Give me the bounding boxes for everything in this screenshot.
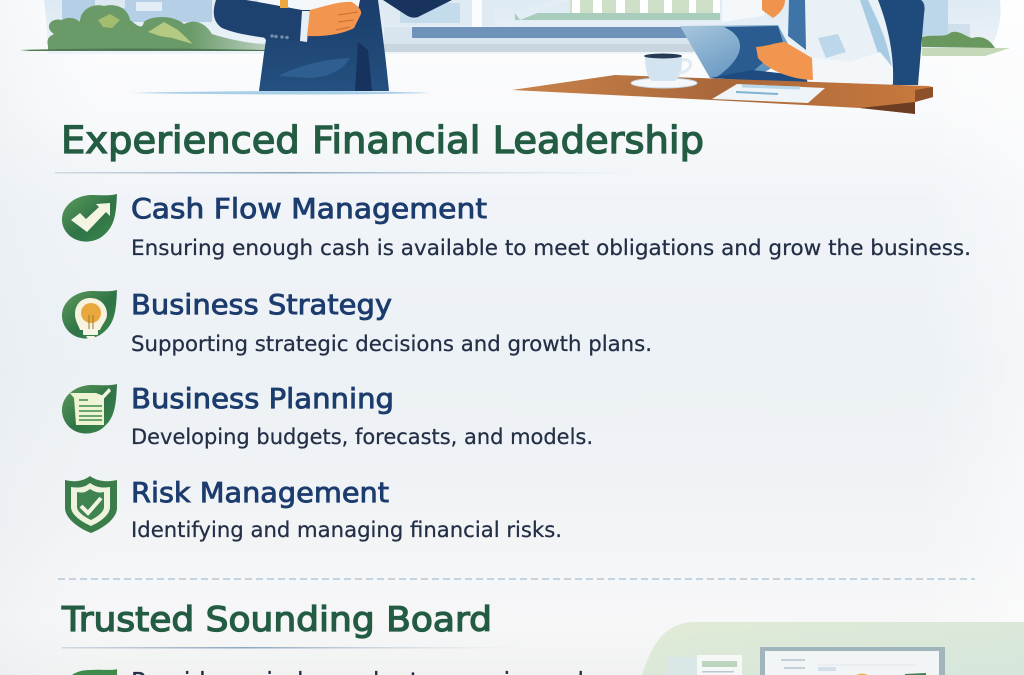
man in suit (130, 0, 452, 94)
icon: check shield (65, 476, 117, 533)
monitor (760, 647, 945, 675)
title: Business Strategy (131, 289, 392, 321)
item: Cash Flow Management (62, 193, 971, 261)
icon: document and pen leaf (62, 384, 117, 434)
chart bars on window (515, 0, 720, 20)
item: Business Strategy (62, 289, 652, 357)
heading: Trusted Sounding Board: Trusted Sounding Board (61, 600, 492, 640)
bushes left (20, 5, 266, 51)
panel: laptop illustration (642, 622, 1024, 675)
city backdrop (44, 0, 1000, 54)
description: Developing budgets, forecasts, and models. (131, 425, 593, 450)
illustration: office header scene (20, 0, 1010, 114)
description: Supporting strategic decisions and growth plans. (131, 332, 652, 357)
heading underline (55, 172, 645, 174)
title: Cash Flow Management (131, 193, 487, 225)
documents (667, 655, 742, 675)
title: Business Planning (131, 383, 394, 415)
bushes right (922, 32, 1010, 56)
desk with cup and document (512, 54, 933, 114)
icon: light bulb leaf (62, 290, 117, 339)
heading underline (62, 647, 522, 648)
woman client with tablet (680, 0, 925, 90)
title: Risk Management (131, 477, 389, 509)
item: Business Planning (62, 383, 593, 450)
item: partial bullet cut off at the bottom (72, 667, 584, 675)
item: Risk Management (65, 476, 562, 543)
ledge bar (412, 27, 687, 38)
section divider (58, 578, 975, 580)
icon: partial leaf (72, 669, 117, 675)
heading: Experienced Financial Leadership: Experienced Financial Leadership (61, 119, 704, 162)
description: Identifying and managing financial risks. (131, 518, 562, 543)
icon: growth arrow leaf (62, 194, 117, 242)
description: Ensuring enough cash is available to meet obligations and grow the business. (131, 236, 971, 261)
